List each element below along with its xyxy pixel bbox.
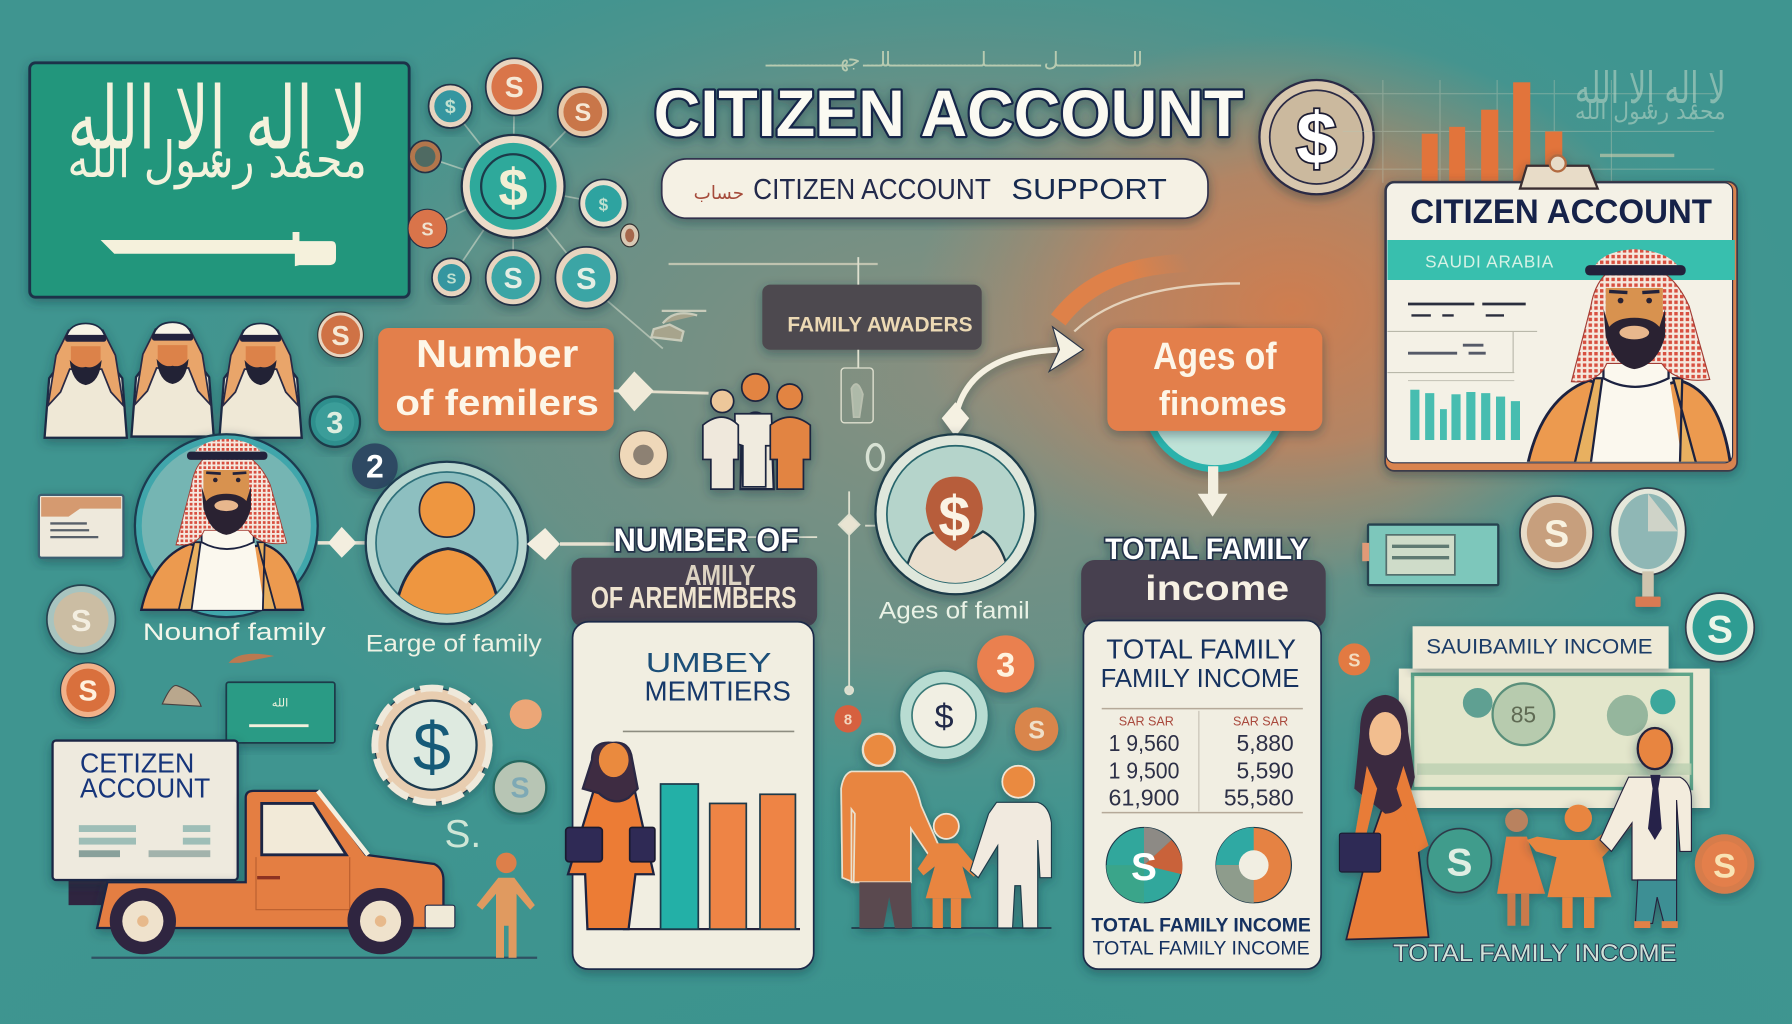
orange S coin [1015, 707, 1058, 751]
connector diamond [614, 371, 709, 411]
label: number of femilers: Number [416, 333, 578, 376]
satellite coin teal bottom: S [504, 263, 523, 295]
banknote header tag [1413, 626, 1669, 669]
income table: 5,590 [1237, 757, 1294, 783]
truck cargo box: ACCOUNT [80, 773, 211, 804]
income table: SAR SAR [1233, 715, 1288, 729]
central dollar coin [462, 135, 565, 238]
panel card: FAMILY INCOME [1101, 663, 1299, 693]
faded flag calligraphy: محمد رسول الله [1575, 99, 1726, 125]
step number 3: 3 [326, 405, 343, 440]
pie chart right [1216, 827, 1291, 903]
coin green [1427, 829, 1491, 893]
banknote header tag: SAUIBAMILY INCOME [1426, 634, 1653, 659]
portrait circle: dollar person [875, 434, 1035, 594]
satellite coin orange right: S [574, 99, 591, 127]
portrait circle: generic person [366, 462, 528, 624]
girl figure [1497, 809, 1545, 926]
card portrait [1528, 249, 1730, 463]
lens under ages label [1146, 331, 1283, 469]
income table: 55,580 [1224, 785, 1294, 811]
income table: SAR SAR [1119, 715, 1174, 729]
white curved arrow [942, 327, 1083, 437]
title: CITIZEN ACCOUNT [654, 77, 1243, 151]
ATM machine icon [1362, 525, 1498, 585]
satellite coin orange lower left: S [421, 218, 434, 239]
orange S coin: S [1028, 716, 1045, 744]
small rock icon [162, 654, 274, 706]
teal band: SAUDI ARABIA [1425, 251, 1554, 271]
coin grey teal: S [510, 773, 530, 805]
delivery truck [53, 741, 537, 958]
satellite coin orange top [486, 58, 543, 115]
coin green: S [1446, 841, 1472, 884]
orange blob token [510, 699, 542, 729]
large dollar coin with ring [375, 688, 489, 802]
large dollar coin with ring: $ [413, 708, 451, 785]
truck cab [97, 791, 455, 928]
silver dollar coin: $ [934, 698, 954, 736]
panel heading: OF AREMEMBERS [591, 580, 797, 615]
large dollar coin [1259, 80, 1374, 194]
small grey icon [651, 264, 878, 341]
faded flag calligraphy [1575, 64, 1726, 155]
panel footers [1091, 914, 1311, 959]
panel card: UMBEY [646, 647, 771, 678]
coin teal right: S [1707, 608, 1733, 651]
small red coin: 8 [844, 713, 852, 729]
small red coin [834, 705, 862, 733]
beige token [619, 431, 667, 479]
banknote: 85 [1511, 701, 1536, 727]
truck wheels [110, 888, 414, 954]
coin orange S [61, 663, 115, 718]
step number 2 [352, 443, 398, 489]
central vertical connector [731, 257, 1034, 695]
label: ages of finomes: finomes [1159, 385, 1287, 423]
step number 3 [310, 397, 360, 447]
coin orange S [318, 312, 363, 358]
central dollar coin: $ [499, 159, 528, 218]
panel card: TOTAL FAMILY [1106, 633, 1296, 664]
number coin 3: 3 [996, 647, 1015, 685]
panel heading [571, 522, 817, 626]
panel heading: TOTAL FAMILY [1105, 533, 1309, 566]
down arrow [1198, 466, 1227, 517]
family trio [703, 374, 810, 489]
panel heading: AMILY [685, 560, 755, 592]
subtitle pill: SUPPORT [1011, 174, 1167, 206]
child figure [1527, 805, 1637, 928]
small orange coin [1338, 643, 1370, 675]
label: family awaders [762, 285, 982, 350]
income table: 1 9,560 [1109, 730, 1179, 756]
ID card [1385, 155, 1737, 471]
satellite coin brown left [409, 141, 441, 173]
satellite coin teal right: $ [599, 194, 609, 214]
panel heading [1081, 533, 1326, 629]
orange curved arrow band [1058, 263, 1240, 331]
coin beige S [47, 585, 115, 654]
satellite coin teal bottom left [432, 258, 471, 297]
coin teal right [1686, 593, 1754, 662]
banknote [1399, 669, 1710, 808]
small coin far right [621, 224, 639, 247]
income table: 1 9,500 [1109, 757, 1179, 783]
panel card [1083, 621, 1321, 969]
small green flag card: الله [272, 695, 288, 709]
satellite coin teal upper left: $ [445, 96, 456, 118]
coin orange: S [1713, 848, 1736, 886]
woman in abaya [1339, 695, 1429, 939]
truck ground line [91, 957, 537, 959]
satellite coin teal bottom right: S [576, 261, 597, 296]
bar chart [623, 784, 800, 929]
woman figure with bag [566, 743, 655, 929]
income table: 5,880 [1237, 730, 1294, 756]
subtitle pill: حساب [694, 183, 744, 204]
card mini bar chart [1410, 390, 1520, 440]
panel card: MEMTIERS [645, 676, 791, 707]
panel footers: TOTAL FAMILY INCOME [1091, 914, 1311, 936]
panel: number of family members [566, 522, 817, 969]
coin beige S: S [71, 603, 91, 638]
subtitle pill: CITIZEN ACCOUNT [753, 174, 991, 206]
satellite coin orange lower left [408, 209, 447, 248]
coin beige S right: S [1544, 512, 1569, 554]
truck cargo box [53, 741, 238, 880]
flag sword [101, 232, 336, 266]
truck cargo box: CETIZEN [80, 748, 194, 779]
caption: total family income: TOTAL FAMILY INCOME [1393, 940, 1677, 967]
number coin 3 [977, 635, 1034, 693]
label: number of femilers: of femilers [395, 382, 599, 423]
teal band [1387, 240, 1735, 280]
coin grey teal [494, 761, 546, 814]
flag calligraphy [67, 69, 367, 190]
label: number of femilers [378, 328, 614, 431]
small ID card [39, 495, 123, 558]
satellite coin teal bottom right [555, 247, 617, 309]
small green flag card [226, 682, 335, 743]
panel heading: NUMBER OF [614, 522, 799, 558]
step number 2: 2 [366, 449, 384, 485]
satellite coin teal right [579, 179, 627, 227]
satellite coin teal bottom [486, 250, 541, 305]
subtitle pill [662, 159, 1208, 218]
silver dollar coin [899, 671, 989, 760]
satellite coin orange top: S [505, 72, 524, 104]
coin orange S: S [331, 320, 350, 351]
connector diamond right [527, 528, 617, 560]
family holding hands [841, 734, 1051, 928]
coin network [408, 58, 663, 349]
small orange coin: S [1348, 649, 1360, 670]
flag of Saudi Arabia [30, 63, 409, 297]
portrait circle: dollar person: $ [938, 485, 970, 549]
connector diamond left [318, 527, 366, 558]
flag calligraphy: محمد رسول الله [67, 130, 367, 190]
pie chart left [1106, 827, 1182, 903]
caption: noun of family: Nounof family [143, 619, 326, 646]
truck chassis [69, 880, 107, 905]
clip on card [1520, 155, 1598, 189]
coin orange S: S [78, 676, 98, 708]
caption: earge of family: Earge of family [366, 630, 542, 657]
label: family awaders: FAMILY AWADERS [787, 311, 973, 336]
large dollar coin: $ [1296, 98, 1337, 179]
flag calligraphy: لا إله إلا الله [67, 69, 367, 171]
panel card [573, 622, 814, 969]
label: ages of finomes [1107, 328, 1322, 431]
man with tie [1600, 728, 1691, 928]
background bar chart with grid [1343, 80, 1714, 183]
coin beige S right [1520, 496, 1593, 569]
income table [1102, 709, 1303, 813]
pie chart left: S [1131, 846, 1157, 889]
label: ages of finomes: Ages of [1153, 335, 1277, 377]
satellite coin teal upper left [429, 85, 472, 128]
pale dollar mark: S. [445, 813, 481, 856]
satellite coin teal bottom left: S [446, 271, 456, 287]
card data lines [1387, 304, 1537, 381]
faded flag calligraphy: لا إله إلا الله [1575, 64, 1726, 114]
panel: total family income [1081, 533, 1326, 969]
portrait circle: man [135, 434, 318, 617]
panel footers: TOTAL FAMILY INCOME [1093, 937, 1310, 959]
small orange person [477, 853, 535, 958]
three men row [45, 322, 302, 438]
card title: CITIZEN ACCOUNT [1410, 193, 1712, 231]
magnifying glass [1610, 488, 1686, 607]
panel heading: income [1145, 568, 1289, 608]
income table: 61,900 [1109, 785, 1179, 811]
caption: ages of family: Ages of famil [879, 597, 1030, 624]
top arabic decoration: للــــــــــــــــــل ـــــــــــــلــــــــــــــــــــــللــــ جهــــــــــــــــــ [765, 47, 1143, 71]
coin orange [1695, 834, 1754, 894]
satellite coin orange right [558, 87, 608, 137]
